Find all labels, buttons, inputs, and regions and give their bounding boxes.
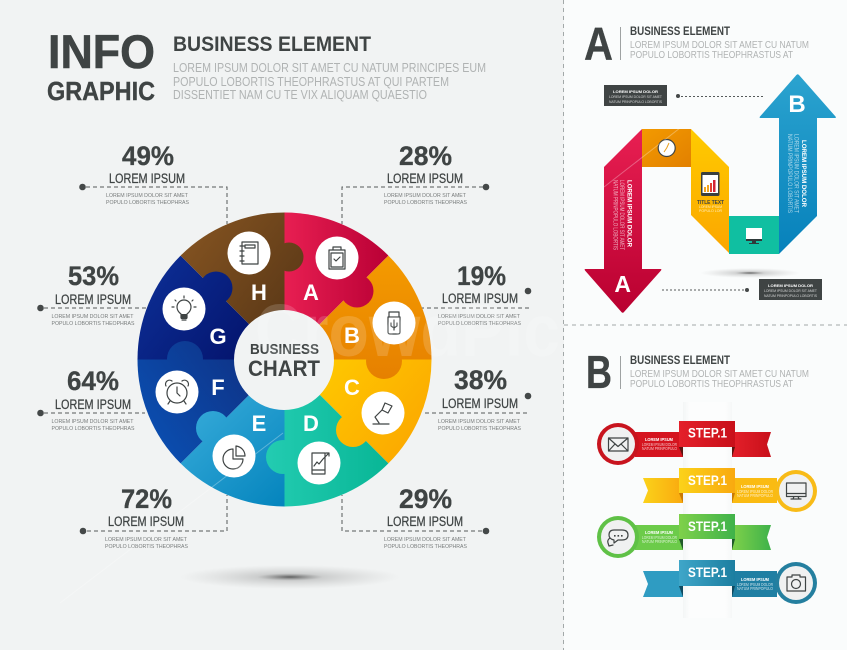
yellow segment with tablet: POPULO LOR [699,209,723,213]
icon: chat bubbles [597,516,639,558]
yellow segment with tablet [691,129,729,253]
header: section B: LOREM IPSUM DOLOR SIT AMET CU NATUM [630,369,809,380]
arrow diagram [585,74,836,313]
step 1: red: NATUM PRINPOPULO [642,446,677,451]
center hub [234,310,334,410]
callout: 53%: LOREM IPSUM [55,292,131,307]
segment letters: E [252,411,266,436]
icon: pie chart [212,434,256,478]
arrow A: red: LOREM IPSUM DOLOR [626,180,632,247]
segment letters: F [211,375,225,400]
callout: 28%: 28% [399,141,452,171]
step 3: green: STEP.1 [688,519,727,534]
step 4: blue: LOREM IPSUM [741,577,769,583]
connector: bottom label to arrow A [662,288,749,292]
callout: 29%: LOREM IPSUM DOLOR SIT AMET [384,537,467,543]
header: section B: B [586,346,612,398]
header: section A: LOREM IPSUM DOLOR SIT AMET CU NATUM [630,40,809,51]
header: section A [584,18,809,70]
step 2: yellow: STEP.1 [688,473,727,488]
step 3: green: LOREM IPSUM DOLOR [642,535,677,540]
orange segment with clock [642,129,691,167]
callout: 38%: LOREM IPSUM [442,396,518,411]
title: info graphic: INFO [48,25,155,78]
callout: 19% [420,261,531,327]
callout: 49%: 49% [122,141,174,171]
heading: business element: POPULO LOBORTIS THEOPHRASTUS AT QUI PARTEM [173,74,449,89]
title: info graphic [47,25,155,106]
callout: 64% [37,366,145,432]
callout: 19%: POPULO LOBORTIS THEOPHRAS [438,321,521,327]
title: info graphic: GRAPHIC [47,76,155,106]
callout: 19%: LOREM IPSUM [442,291,518,306]
callout: 49% [79,141,227,224]
heading: business element: BUSINESS ELEMENT [173,33,371,56]
callout: 19%: LOREM IPSUM DOLOR SIT AMET [438,314,521,320]
arrow A: red [585,129,661,313]
icon: alarm clock [156,370,198,414]
segment letters: D [303,411,319,436]
step 3: green: LOREM IPSUM [645,530,673,536]
step 1: red: STEP.1 [688,426,727,441]
step 2: yellow: NATUM PRINPOPULO [737,493,773,498]
arrow B: blue: NATUM PRINPOPULO LOBORTIS [786,134,792,213]
icon: light bulb [162,288,206,330]
label box: top: LOREM IPSUM DOLOR [613,89,658,94]
chart: puzzle wheel [138,212,432,506]
heading: business element [173,33,486,102]
yellow segment with tablet: LOREM IPSUM [699,205,722,209]
callout: 29%: 29% [399,484,452,514]
header: section A: A [584,18,613,70]
step 4: blue [643,560,817,604]
header: section B: POPULO LOBORTIS THEOPHRASTUS AT [630,379,793,390]
heading: business element: DISSENTIET NAM CU TE VIX ALIQUAM QUAESTIO [173,87,427,102]
shadow under arrows [700,268,800,278]
callout: 19%: 19% [457,261,506,291]
callout: 38%: LOREM IPSUM DOLOR SIT AMET [438,419,521,425]
step 1: red: LOREM IPSUM [645,437,673,443]
center hub: CHART [248,356,321,381]
callout: 28%: LOREM IPSUM DOLOR SIT AMET [384,193,467,199]
header: section A: BUSINESS ELEMENT [630,26,730,38]
callout: 38%: POPULO LOBORTIS THEOPHRAS [438,426,521,432]
center hub: BUSINESS [250,341,319,358]
callout: 29%: LOREM IPSUM [387,514,463,529]
step 4: blue: NATUM PRINPOPULO [737,586,773,591]
arrow B: blue: B [788,91,806,118]
segment letters: A [303,280,319,305]
callout: 64%: LOREM IPSUM DOLOR SIT AMET [52,419,134,425]
callout: 72% [80,484,227,550]
step 4: blue: LOREM IPSUM DOLOR [737,582,773,587]
callout: 29% [342,484,489,550]
callout: 72%: 72% [121,484,172,514]
callout: 49%: LOREM IPSUM DOLOR SIT AMET [106,193,189,199]
label box: top [604,85,667,106]
label box: top: NATUM PRINPOPULO LOBORTIS [609,100,663,104]
callout: 49%: POPULO LOBORTIS THEOPHRAS [106,200,189,206]
label box: bottom: LOREM IPSUM DOLOR SIT AMET [764,289,818,293]
callout: 53%: 53% [68,261,119,291]
segment letters [209,280,360,436]
step 3: green: NATUM PRINPOPULO [642,539,677,544]
arrow A: red: LOREM IPSUM DOLOR SIT AMET [618,180,624,250]
shadow under pie [180,565,400,589]
yellow segment with tablet: TITLE TEXT [697,200,725,206]
label box: bottom [759,279,822,300]
segment letters: H [251,280,267,305]
icon: usb drive [372,302,416,344]
icon: tablet chart [298,442,340,484]
icon: clipboard [316,236,358,280]
watermark: CrowdPic [255,289,560,372]
step 2: yellow [643,468,817,512]
callout: 38%: 38% [454,365,507,395]
step 2: yellow: LOREM IPSUM [741,484,769,490]
callout: 64%: 64% [67,366,119,396]
segment letters: C [344,375,360,400]
heading: business element: LOREM IPSUM DOLOR SIT AMET CU NATUM PRINCIPES EUM [173,60,486,75]
callout: 53%: POPULO LOBORTIS THEOPHRAS [52,321,135,327]
step 4: blue: STEP.1 [688,565,727,580]
label box: bottom: LOREM IPSUM DOLOR [768,283,813,288]
segment letters: G [209,324,227,349]
segment letters: B [344,323,360,348]
step 3: green [597,514,771,558]
label box: bottom: NATUM PRINPOPULO LOBORTIS [764,294,818,298]
arrow B: blue [760,74,836,254]
connector: top label to arrow B [676,94,764,98]
header: section A: POPULO LOBORTIS THEOPHRASTUS AT [630,50,793,61]
white column behind steps [683,402,732,618]
header: section B [586,346,809,398]
icon: monitor [775,470,817,512]
callout: 28% [342,141,489,224]
step 2: yellow: LOREM IPSUM DOLOR [737,489,773,494]
callout: 38% [425,365,531,432]
callout: 64%: LOREM IPSUM [55,397,131,412]
step 1: red [597,421,771,465]
arrow B: blue: LOREM IPSUM DOLOR [800,140,807,207]
icon: notebook [228,232,270,274]
icon: camera [775,562,817,604]
callout: 64%: POPULO LOBORTIS THEOPHRAS [52,426,135,432]
arrow A: red: A [614,271,631,297]
icon: desk lamp [362,392,404,434]
callout: 49%: LOREM IPSUM [109,171,185,186]
callout: 72%: LOREM IPSUM [108,514,184,529]
callout: 72%: POPULO LOBORTIS THEOPHRAS [105,544,188,550]
callout: 29%: POPULO LOBORTIS THEOPHRAS [384,544,467,550]
callout: 53% [37,261,150,327]
callout: 72%: LOREM IPSUM DOLOR SIT AMET [105,537,188,543]
arrow A: red: NATUM PRINPOPULO LOBORTIS [612,180,618,250]
teal segment with monitor [729,216,779,254]
callout: 28%: POPULO LOBORTIS THEOPHRAS [384,200,467,206]
step 1: red: LOREM IPSUM DOLOR [642,442,677,447]
callout: 53%: LOREM IPSUM DOLOR SIT AMET [52,314,134,320]
icon: envelope [597,423,639,465]
header: section B: BUSINESS ELEMENT [630,355,730,367]
label box: top: LOREM IPSUM DOLOR SIT AMET [609,95,663,99]
callout: 28%: LOREM IPSUM [387,171,463,186]
arrow B: blue: LOREM IPSUM DOLOR SIT AMET [792,134,798,213]
